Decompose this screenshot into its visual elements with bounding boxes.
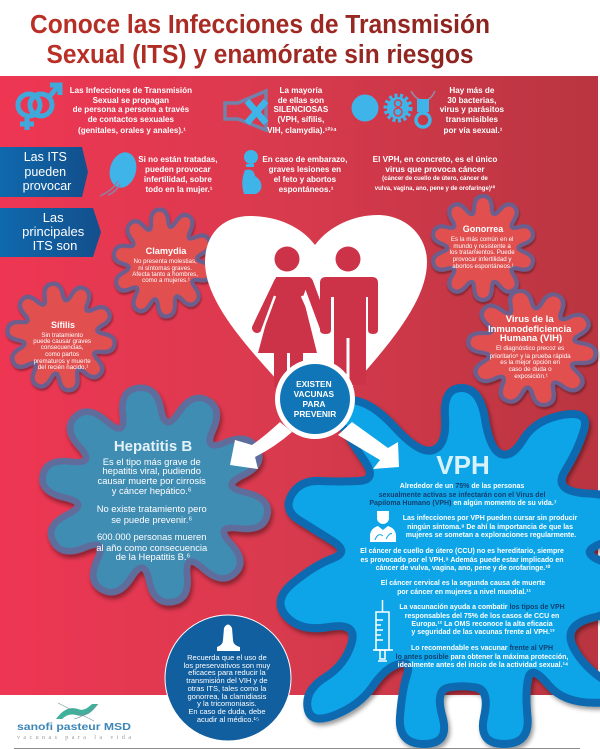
virus blob: Sífilis: Sífilis (51, 320, 75, 330)
virus blob: Clamydia: No presenta molestias, (133, 258, 197, 265)
VPH paragraph 3: cáncer de vulva, vagina, ano, pene y de orofaringe.¹⁰ (376, 564, 551, 572)
logo: sanofi pasteur MSD (17, 703, 131, 741)
text: more than 30 agents: virus y parásitos (440, 105, 505, 114)
VPH heading: VPH (436, 450, 490, 480)
virus blob: Clamydia: como a mujeres.¹ (142, 277, 190, 284)
virus blob: Hepatitis B: al año como consecuencia (96, 542, 208, 553)
virus blob: Hepatitis B: 600.000 personas mueren (97, 531, 206, 542)
virus blob: Hepatitis B: No existe tratamiento pero (97, 503, 207, 514)
banner: Las ITS pueden provocar: pueden (24, 165, 66, 179)
logo: sanofi pasteur MSD: vacunas para la vida (17, 735, 131, 741)
icon: woman figure (257, 246, 325, 387)
banner: Las ITS pueden provocar: Las ITS (24, 150, 67, 164)
text: silent infections: SILENCIOSAS (273, 105, 329, 114)
banner: Las ITS pueden provocar: provocar (23, 179, 71, 193)
text: more than 30 agents: Hay más de (449, 86, 495, 95)
icon: man figure (320, 246, 378, 390)
title (30, 11, 490, 69)
virus blob: Hepatitis B: se puede prevenir.⁶ (111, 514, 192, 525)
callout: condoms: eficaces para reducir la (188, 668, 267, 677)
text: how ITS spread: de persona a persona a través (73, 105, 190, 114)
text: more than 30 agents: 30 bacterias, (447, 96, 496, 105)
bottom rule (14, 748, 580, 749)
VPH paragraph 4: El cáncer cervical es la segunda causa de muerte (381, 580, 545, 587)
virus blob: Sífilis: consecuencias, (41, 344, 84, 351)
icon: sperm and egg (100, 149, 140, 196)
virus blob: VIH: El diagnóstico precoz es (496, 345, 564, 352)
text: pregnancy: En caso de embarazo, (262, 155, 347, 164)
text: VPH cancer: (cáncer de cuello de útero, cáncer de (382, 176, 489, 182)
callout: condoms (165, 615, 291, 741)
logo: sanofi pasteur MSD: sanofi pasteur MSD (17, 721, 131, 733)
heart (205, 215, 427, 425)
virus blob: Hepatitis B: causar muerte por cirrosis (98, 475, 206, 486)
VPH paragraph 5: y seguridad de las vacunas frente al VPH.¹³ (411, 629, 555, 636)
text: silent infections: (VPH, sífilis, (277, 115, 324, 124)
virus blob: VIH: Humana (VIH) (500, 333, 562, 344)
callout: condoms: acudir al médico.¹⁵ (197, 715, 259, 724)
title: Conoce las Infecciones de Transmisión (30, 11, 490, 39)
VPH paragraph 5: Europa.¹² La OMS reconoce la alta eficacia (411, 621, 553, 628)
virus blob: Gonorrea: Es la más común en el (451, 236, 513, 243)
text: infertility: Si no están tratadas, (138, 155, 217, 164)
virus blob: Sífilis: como partos (45, 351, 79, 358)
text: how ITS spread: Sexual se propagan (93, 96, 169, 105)
virus blob: Gonorrea: Gonorrea (463, 224, 504, 234)
vaccine circle: PARA (303, 399, 325, 409)
callout: condoms: Recuerda que el uso de (187, 653, 267, 662)
VPH paragraph 2: ningún síntoma.⁸ De ahí la importancia de que las (407, 524, 573, 531)
text: how ITS spread: Las Infecciones de Transmisión (70, 86, 192, 95)
VPH paragraph 4: por cáncer en mujeres a nivel mundial.¹¹ (397, 589, 532, 596)
callout: condoms: los preservativos son muy (184, 661, 271, 670)
VPH paragraph 5: responsables del 75% de los casos de CCU en (405, 613, 559, 620)
text: silent infections: VIH, clamydia).¹²³⁴ (267, 126, 337, 135)
VPH paragraph 6: lo antes posible para obtener la máxima protección, (396, 654, 568, 661)
text: pregnancy: graves lesiones en (269, 165, 341, 174)
callout: condoms: gonorrea, la clamidiasis (188, 692, 267, 701)
text: more than 30 agents: por vía sexual.¹ (444, 126, 503, 135)
virus blob: VIH: es la mejor opción en (500, 359, 561, 366)
virus blob: Sífilis: del recién nacido.¹ (38, 364, 88, 371)
banner: Las principales ITS son (0, 208, 101, 257)
VPH paragraph 2: Las infecciones por VPH pueden cursar sin producir (403, 515, 578, 522)
text: pregnancy: el feto y abortos (274, 175, 337, 184)
icon: silent speaker (225, 91, 266, 130)
text: more than 30 agents: transmisibles (446, 115, 498, 124)
virus blob: Hepatitis B: y cáncer hepático.⁶ (112, 485, 192, 496)
title: Sexual (ITS) y enamórate sin riesgos (46, 41, 474, 69)
virus blob: Hepatitis B: de la Hepatitis B.⁶ (116, 551, 191, 562)
virus blob: VPH (280, 388, 600, 744)
VPH paragraph 5: La vacunación ayuda a combatir los tipos de VPH (399, 604, 565, 611)
virus blob: Sífilis: puede causar graves (33, 338, 91, 345)
callout: condoms: En caso de duda, debe (188, 707, 266, 716)
virus blob: Gonorrea: mundo y resistente a (453, 243, 511, 250)
virus blob: Clamydia: ni síntomas graves. (138, 265, 192, 272)
arrow: to VPH (338, 422, 399, 469)
virus blob: Clamydia: Afecta tanto a hombres, (132, 271, 198, 278)
virus blob: Sífilis (0, 278, 122, 396)
vaccine circle: VACUNAS (294, 389, 335, 399)
text: VPH cancer (373, 155, 497, 192)
text: pregnancy: espontáneos.¹ (279, 185, 334, 194)
text: silent infections: La mayoría (280, 86, 323, 95)
icon: gender symbols (18, 84, 60, 130)
VPH paragraph 3: El cáncer de cuello de útero (CCU) no es hereditario, siempre (360, 548, 564, 555)
text: infertility: todo en la mujer.¹ (145, 185, 213, 194)
VPH paragraph 1: Alrededor de un 75% de las personas (400, 483, 524, 490)
virus blob: Hepatitis B: Es el tipo más grave de (103, 456, 201, 467)
VPH paragraph 2: mujeres se sometan a exploraciones regularmente. (406, 532, 576, 539)
virus blob: VIH: Virus de la (506, 314, 554, 325)
vaccine circle: EXISTEN (296, 379, 332, 389)
virus blob: VIH: exposición.¹ (514, 373, 548, 380)
vaccine circle (275, 359, 355, 439)
banner: Las ITS pueden provocar (0, 147, 88, 197)
icon: virus and bacteria (352, 91, 435, 127)
virus blob: Clamydia: Clamydia (146, 246, 187, 256)
icon: doctor (370, 511, 396, 542)
VPH paragraph 1: sexualmente activas se infectarán con el Virus del (379, 492, 545, 499)
text: VPH cancer: vulva, vagina, ano, pene y de orofaringe)¹⁰ (375, 185, 496, 192)
text: how ITS spread: (genitales, orales y anales).¹ (78, 126, 186, 135)
virus blob: Gonorrea: abortos espontáneos.¹ (452, 263, 514, 270)
banner: Las principales ITS son: ITS son (33, 238, 77, 253)
banner: Las principales ITS son: Las (43, 210, 64, 225)
virus blob: Gonorrea: provocar infertilidad y (453, 256, 512, 263)
virus blob: Sífilis: prematuros y muerte (34, 358, 91, 365)
virus blob: Hepatitis B (25, 373, 285, 617)
virus blob: Hepatitis B: hepatitis viral, pudiendo (102, 465, 201, 476)
virus blob: VIH (463, 286, 600, 410)
text: infertility: infertilidad, sobre (144, 175, 212, 184)
virus blob: Gonorrea: los tratamientos. Puede (450, 249, 515, 256)
arrow: to Hepatitis B (230, 422, 292, 469)
VPH paragraph 3: es provocado por el VPH.⁹ Además puede estar implicado en (361, 557, 564, 564)
VPH paragraph 6: idealmente antes del inicio de la actividad sexual.¹⁴ (398, 662, 569, 669)
virus blob: VIH: Inmunodeficiencia (488, 324, 572, 335)
text: silent infections: de ellas son (278, 96, 324, 105)
callout: condoms: y la tricomoniasis. (197, 699, 257, 708)
VPH paragraph 1: Papiloma Humano (VPH) en algún momento de su vida.⁷ (369, 500, 557, 507)
virus blob: Hepatitis B: Hepatitis B (114, 438, 192, 455)
text: VPH cancer: virus que provoca cáncer (385, 165, 485, 174)
virus blob: Clamydia (103, 202, 223, 324)
vaccine circle: PREVENIR (294, 409, 336, 419)
virus blob: Gonorrea (418, 185, 548, 311)
icon: pregnant woman (242, 150, 261, 194)
VPH paragraph 6: Lo recomendable es vacunar frente al VPH (411, 645, 553, 652)
virus blob: Sífilis: Sin tratamiento (41, 332, 83, 339)
text: how ITS spread: de contactos sexuales (88, 115, 175, 124)
text: VPH cancer: El VPH, en concreto, es el único (373, 155, 497, 164)
banner: Las principales ITS son: principales (22, 224, 85, 239)
virus blob: VIH: caso de duda o (509, 366, 552, 373)
virus blob: VIH: prioritario⁵ y la prueba rápida (490, 353, 571, 360)
callout: condoms: transmisión del VIH y de (186, 676, 268, 685)
callout: condoms: otras ITS, tales como la (188, 684, 267, 693)
icon: syringe (373, 600, 393, 661)
text: infertility: pueden provocar (145, 165, 212, 174)
